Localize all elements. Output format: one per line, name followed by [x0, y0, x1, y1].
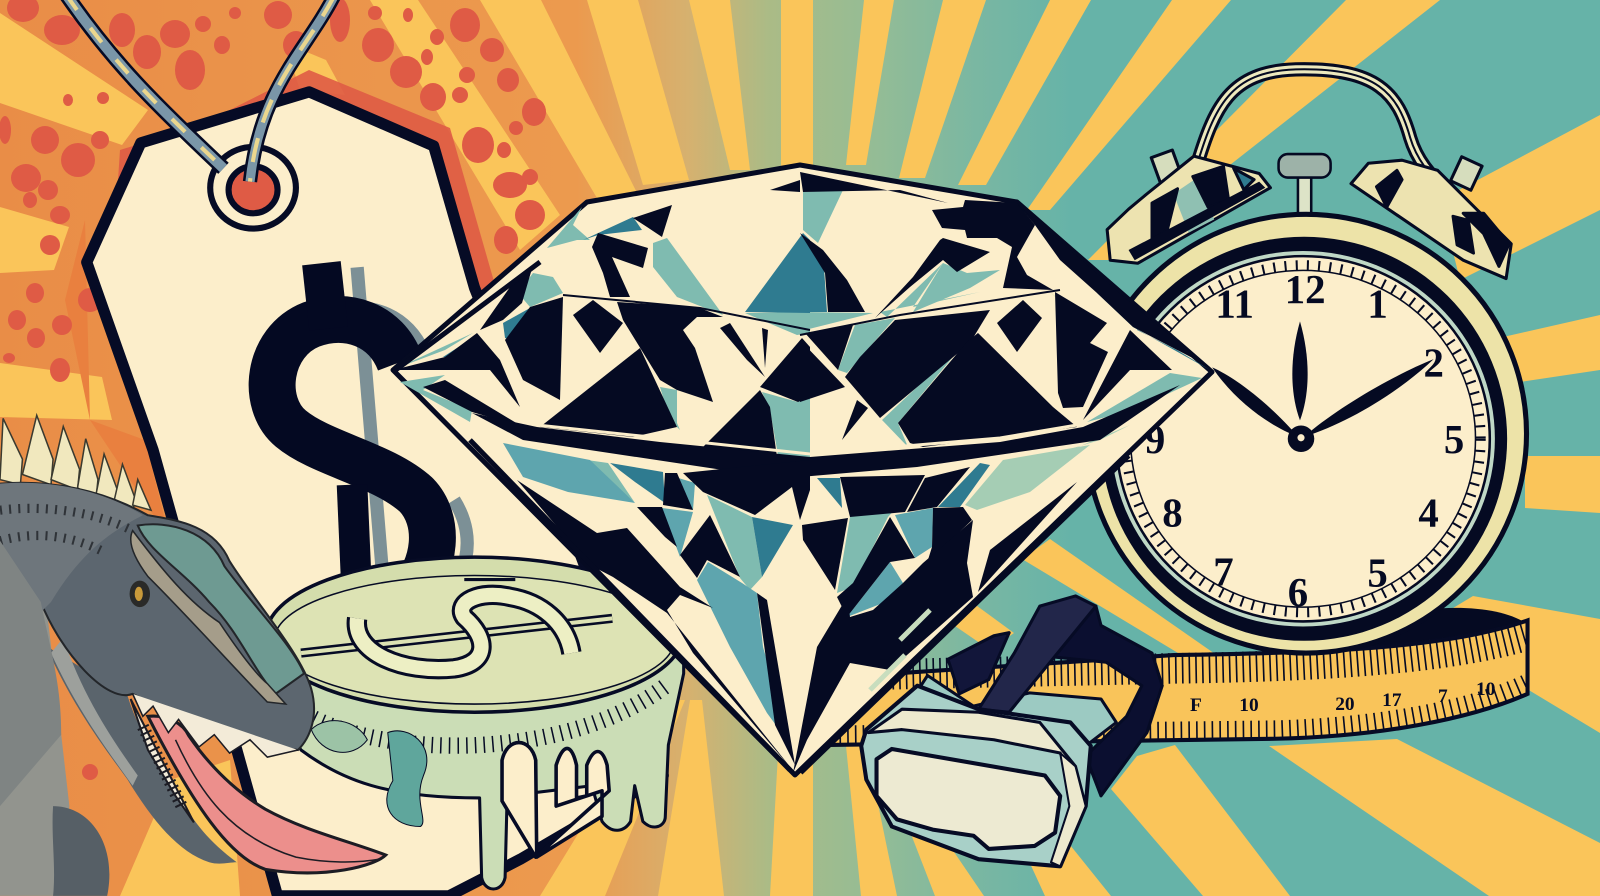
clock face	[1116, 256, 1490, 621]
dollar sign	[272, 263, 432, 602]
dollar sign shadow	[337, 267, 467, 612]
string	[66, 0, 335, 182]
diamond dark teal facets	[443, 217, 1210, 577]
dinosaur lower jaw	[46, 646, 237, 864]
right bell	[1351, 157, 1511, 279]
diamond body	[393, 165, 1212, 775]
clock case	[1086, 214, 1527, 653]
tape numbers: 7	[1438, 686, 1448, 707]
tape numbers	[1190, 679, 1495, 716]
dinosaur teeth	[133, 694, 298, 757]
dinosaur eye	[130, 581, 150, 607]
tape numbers: 10	[1239, 695, 1259, 716]
clock numerals	[1145, 267, 1464, 615]
dinosaur	[0, 415, 386, 896]
coin dollar emblem	[301, 580, 612, 669]
clock numerals: 1	[1367, 281, 1388, 326]
tape numbers: F	[1190, 695, 1202, 716]
alarm clock	[1086, 69, 1527, 653]
price tag	[66, 0, 663, 896]
clock numerals: 5	[1367, 551, 1388, 596]
clock hands	[1212, 321, 1434, 452]
measuring tape	[832, 608, 1528, 745]
clock numerals: 4	[1418, 491, 1439, 536]
dinosaur tongue	[148, 716, 386, 873]
goggles back strap	[948, 633, 1009, 694]
VR goggles	[861, 596, 1162, 866]
goggles body	[861, 686, 1091, 866]
dinosaur head	[0, 483, 314, 750]
clock numerals: 8	[1162, 491, 1183, 536]
clock numerals: 5	[1444, 417, 1464, 462]
tape numbers: 20	[1335, 694, 1355, 715]
diamond mid teal facets	[503, 443, 933, 747]
coin body	[267, 633, 684, 889]
diamond light teal facets	[397, 20, 1202, 593]
left bell	[1107, 150, 1270, 263]
coin with dripping edge	[266, 557, 684, 889]
clock numerals: 12	[1285, 267, 1325, 312]
clock numerals: 2	[1423, 341, 1444, 386]
tape numbers: 17	[1382, 690, 1402, 711]
coin top face	[266, 557, 683, 712]
tape numbers: 10	[1476, 679, 1495, 700]
diamond	[393, 20, 1212, 775]
grommet	[210, 147, 296, 229]
diamond black facets	[393, 172, 1210, 773]
coin ribbing	[306, 684, 668, 746]
diamond highlights and edges	[393, 262, 1128, 772]
clock numerals: 9	[1145, 417, 1165, 462]
winding knob	[1279, 154, 1331, 218]
clock numerals: 6	[1288, 570, 1308, 615]
coin green stain	[387, 731, 427, 827]
clock handle	[1196, 69, 1449, 192]
dinosaur spikes	[0, 415, 151, 510]
splatter: red dots and halo around tag	[0, 0, 546, 780]
dinosaur neck	[0, 510, 69, 896]
clock numerals: 7	[1213, 550, 1234, 595]
drip arches	[502, 743, 609, 857]
dinosaur scales	[138, 524, 304, 694]
clock numerals: 11	[1215, 281, 1254, 326]
dinosaur mouth teeth	[131, 699, 194, 822]
goggles strap	[1045, 606, 1162, 796]
goggles lens	[877, 749, 1060, 849]
goggles rear housing	[912, 676, 1116, 746]
